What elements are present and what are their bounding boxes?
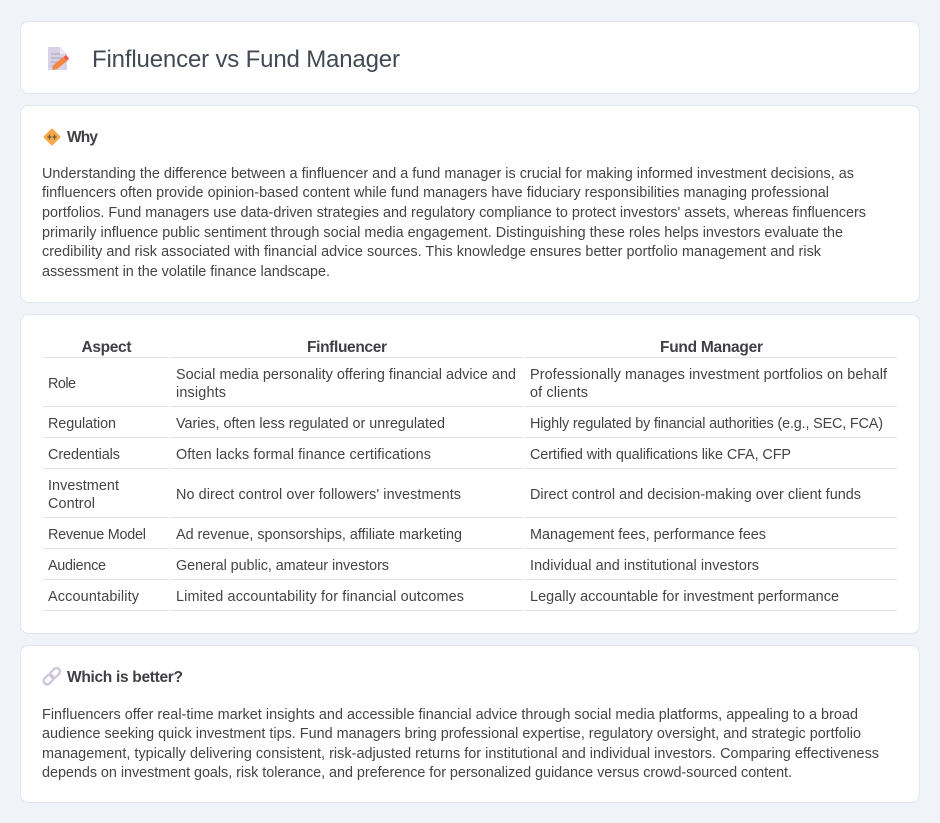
row: regulation: Regulation xyxy=(48,416,116,432)
row: audience: General public, amateur investors xyxy=(176,558,389,574)
heading: why: Why xyxy=(67,129,98,146)
row: revenue model: Management fees, performance fees xyxy=(530,527,766,543)
row: investment control: Investment xyxy=(48,478,119,494)
panel: comparison table xyxy=(20,314,920,634)
row: role xyxy=(48,367,888,401)
row: accountability: Limited accountability for financial outcomes xyxy=(176,589,464,605)
row: investment control: Direct control and decision-making over client funds xyxy=(530,487,861,503)
row: regulation: Varies, often less regulated or unregulated xyxy=(176,416,445,432)
table header: Finfluencer xyxy=(307,339,387,356)
text block: which is better paragraph: management, typically delivering consistent, risk-adjusted returns for institutional and individual investors. Comparing effectiveness xyxy=(42,746,879,762)
row: regulation: Highly regulated by financial authorities (e.g., SEC, FCA) xyxy=(530,416,883,432)
icon: warning diamond xyxy=(44,130,60,144)
text block: which is better paragraph: depends on investment goals, risk tolerance, and preference for personalized guidance versus crowd-sourced content. xyxy=(42,765,792,781)
row: revenue model: Revenue Model xyxy=(48,527,146,543)
row: accountability: Legally accountable for investment performance xyxy=(530,589,839,605)
row: investment control: No direct control over followers' investments xyxy=(176,487,461,503)
text block: why paragraph: Understanding the difference between a finfluencer and a fund manager is crucial for making informed investment decisions, as xyxy=(42,166,854,182)
icon: chain link xyxy=(42,667,61,686)
row: audience xyxy=(48,558,759,574)
row: investment control: Control xyxy=(48,496,95,512)
panel: header xyxy=(20,22,920,94)
row: role: insights xyxy=(176,385,226,401)
text block: why paragraph: credibility and risk associated with financial advice sources. This knowledge ensures better portfolio management and risk xyxy=(42,244,822,260)
text block: why paragraph: assessment in the volatile finance landscape. xyxy=(42,264,330,280)
text block: which is better paragraph xyxy=(42,707,879,781)
text block: why paragraph: portfolios. Fund managers use data-driven strategies and regulatory compliance to protect investors' assets, whereas finfluencers xyxy=(42,205,866,221)
text block: why paragraph xyxy=(42,166,866,280)
icon: document with pencil xyxy=(48,47,69,70)
row: audience: Audience xyxy=(48,558,106,574)
row: investment control xyxy=(48,478,861,512)
table header xyxy=(82,339,763,356)
panel: which is better xyxy=(20,646,920,802)
row: role: Professionally manages investment portfolios on behalf xyxy=(530,367,888,383)
row: credentials: Often lacks formal finance certifications xyxy=(176,447,431,463)
text block: which is better paragraph: audience seeking quick investment tips. Fund managers bring professional expertise, regulatory oversight, and strategic portfolio xyxy=(42,726,861,742)
text block: why paragraph: finfluencers often provide opinion-based content while fund managers have fiduciary responsibilities managing professional xyxy=(42,185,829,201)
row: role: of clients xyxy=(530,385,588,401)
row: revenue model xyxy=(48,527,766,543)
row: accountability: Accountability xyxy=(48,589,140,605)
panel: why xyxy=(20,106,920,302)
row: audience: Individual and institutional investors xyxy=(530,558,759,574)
table header: Aspect xyxy=(82,339,132,356)
row: revenue model: Ad revenue, sponsorships, affiliate marketing xyxy=(176,527,462,543)
row: role: Social media personality offering financial advice and xyxy=(176,367,516,383)
row: credentials: Certified with qualifications like CFA, CFP xyxy=(530,447,791,463)
table header: Fund Manager xyxy=(660,339,763,356)
heading: which is better: Which is better? xyxy=(67,669,183,686)
row: regulation xyxy=(48,416,883,432)
row: accountability xyxy=(48,589,839,605)
text block: which is better paragraph: Finfluencers offer real-time market insights and accessible financial advice through social media platforms, appealing to a broad xyxy=(42,707,858,723)
row: role: Role xyxy=(48,376,76,392)
title: Finfluencer vs Fund Manager xyxy=(92,46,400,73)
text block: why paragraph: primarily influence public sentiment through social media engagement. Distinguishing these roles helps investors evaluate the xyxy=(42,225,843,241)
row: credentials xyxy=(48,447,791,463)
row: credentials: Credentials xyxy=(48,447,120,463)
